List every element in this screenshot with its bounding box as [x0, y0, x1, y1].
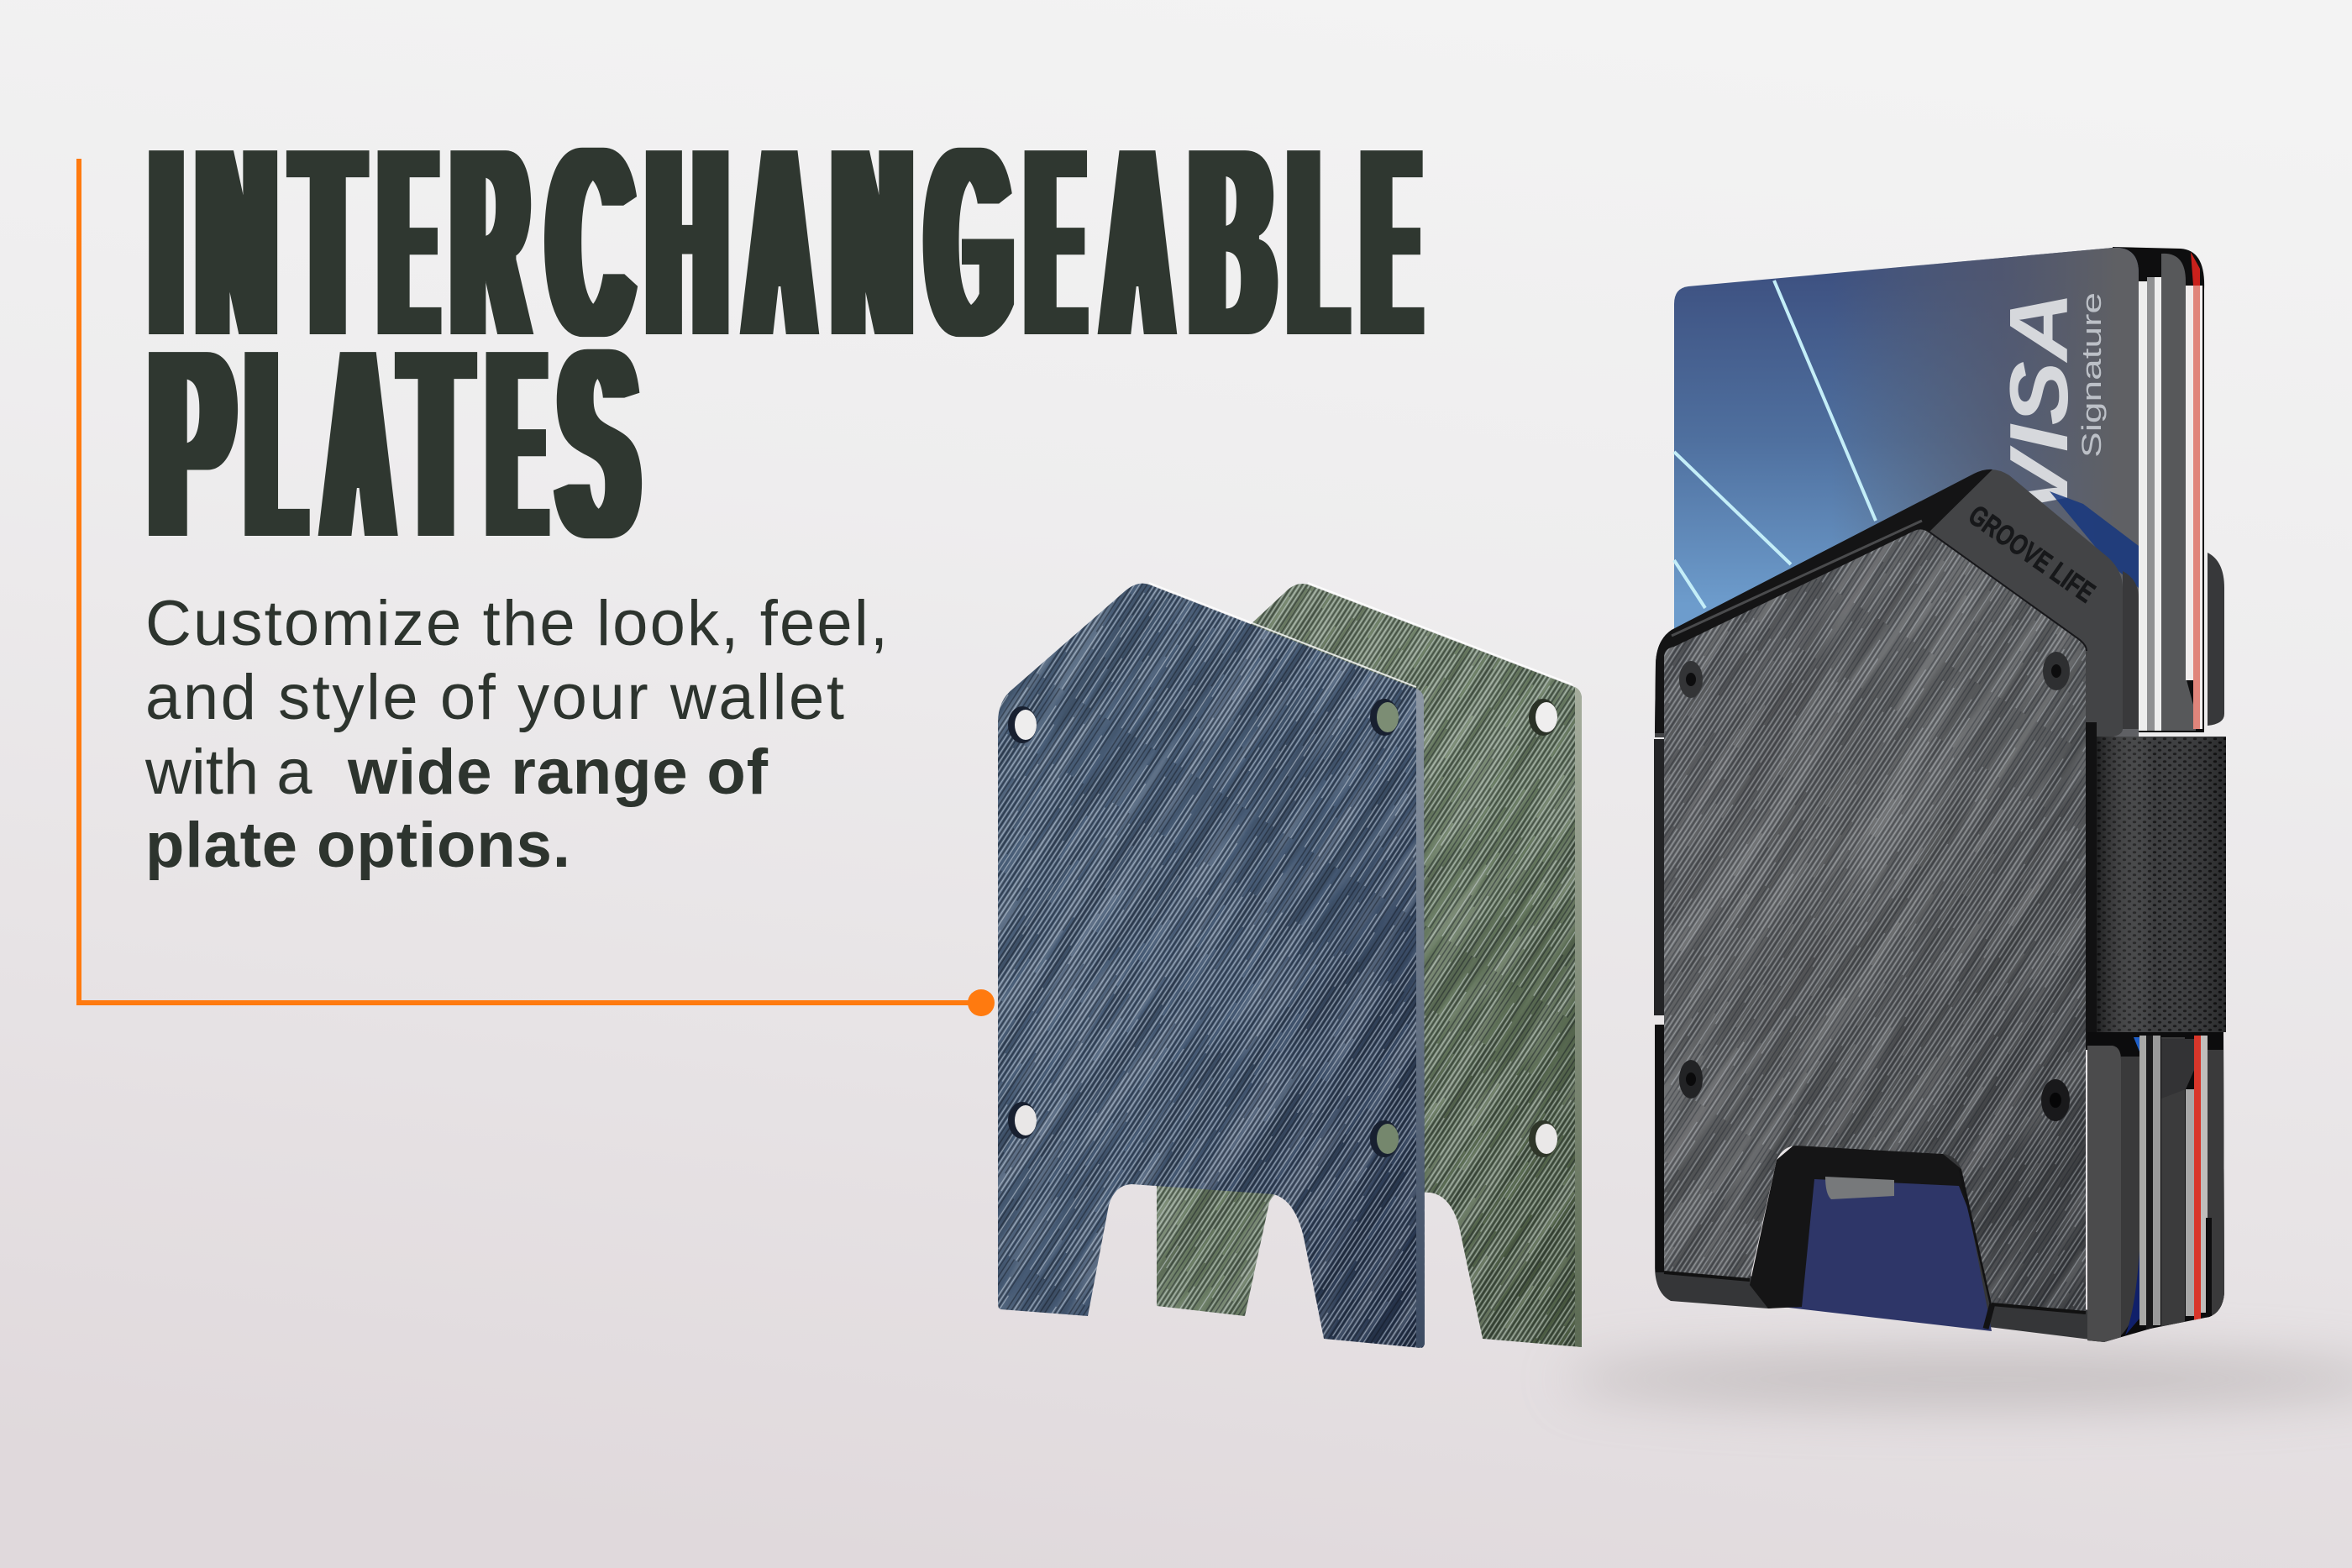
- title: A: [1105, 90, 1169, 394]
- body text: wide range of: [347, 737, 769, 808]
- title: C: [550, 90, 631, 394]
- title: B: [1192, 90, 1273, 394]
- screws: [1679, 652, 2070, 1121]
- title: R: [454, 90, 526, 394]
- title: E: [1366, 90, 1416, 394]
- title: S: [560, 291, 636, 595]
- title: N: [199, 90, 274, 394]
- body text: [144, 588, 888, 881]
- card chip: [1825, 1177, 1894, 1199]
- title: E: [383, 90, 433, 394]
- title: L: [1292, 90, 1343, 394]
- title: P: [151, 291, 231, 595]
- wallet frame lower: [1655, 722, 2104, 1341]
- title: N: [835, 90, 910, 394]
- GROOVE LIFE engraving: GROOVE LIFE: [1962, 499, 2101, 609]
- title: H: [649, 90, 725, 394]
- wallet frame upper: [1655, 469, 2139, 737]
- card seen through notch: [1781, 1172, 1992, 1331]
- card: [1674, 248, 2139, 756]
- VISA logo: VISA: [1992, 291, 2085, 517]
- title: A: [326, 291, 390, 595]
- textured front plate: [1663, 529, 2087, 1314]
- body text: and style of your wallet: [145, 662, 844, 733]
- card stack edges, lower: [2087, 1032, 2230, 1345]
- body text: with a: [145, 737, 312, 808]
- card light lines: [1674, 281, 1876, 608]
- right elastic band: [2095, 737, 2226, 1032]
- left elastic band strip: [1654, 739, 1665, 1015]
- title: I: [153, 90, 180, 394]
- body text: plate options.: [145, 810, 570, 881]
- wallet right tab: [2208, 553, 2224, 726]
- wallet shadow: [1562, 1352, 2352, 1406]
- wallet with card: [1654, 247, 2226, 1342]
- title: A: [748, 90, 811, 394]
- title: T: [296, 90, 360, 394]
- title: G: [929, 90, 1011, 394]
- Signature: Signature: [2076, 292, 2107, 458]
- title: L: [249, 291, 302, 595]
- title: T: [404, 291, 468, 595]
- title: E: [491, 291, 542, 595]
- title: [149, 90, 1425, 595]
- callout line with dot: [79, 159, 995, 1016]
- card stack edges, upper: [2113, 247, 2204, 732]
- blue plate: [998, 583, 1425, 1348]
- green plate: [1157, 583, 1582, 1347]
- body text: Customize the look, feel,: [145, 588, 888, 659]
- title: E: [1030, 90, 1081, 394]
